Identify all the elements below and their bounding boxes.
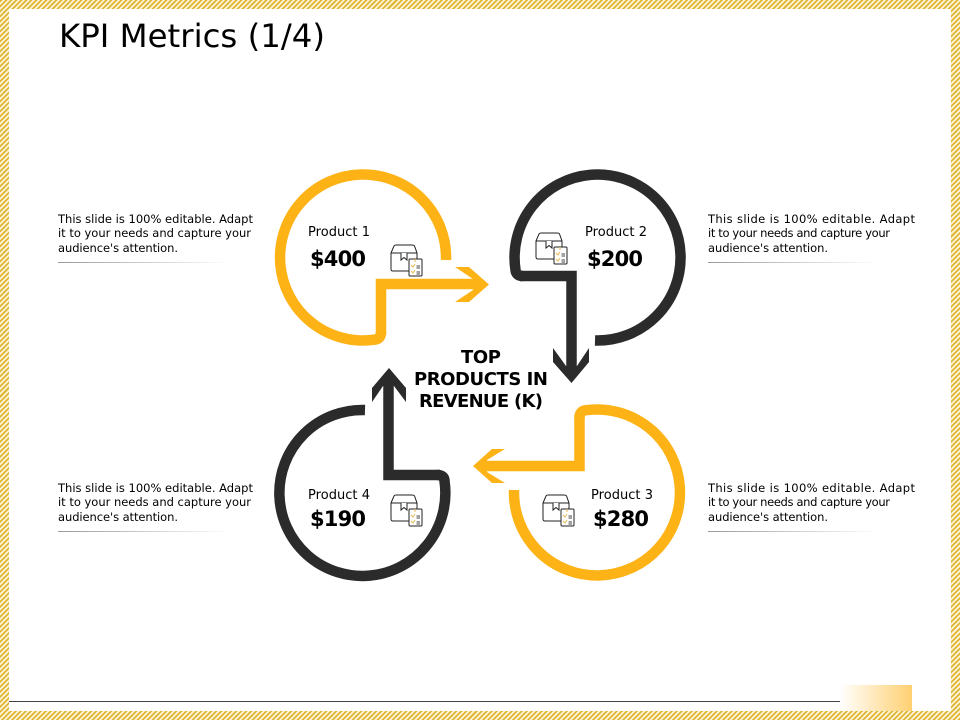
center heading: REVENUE (K) [419, 391, 543, 412]
text block: top right: This slide is 100% editable. Adapt [707, 212, 915, 226]
text block: top left: it to your needs and capture your [58, 226, 251, 240]
icon: box with checklist, product 2 [536, 233, 567, 264]
text block: top right: it to your needs and capture your [708, 226, 890, 240]
text block: bottom left: audience's attention. [58, 510, 178, 524]
center heading: TOP [461, 347, 501, 368]
title: KPI Metrics (1/4) [59, 17, 325, 55]
footer gradient tab [840, 685, 912, 711]
text block: bottom right: audience's attention. [708, 510, 828, 524]
text block: top left: audience's attention. [58, 241, 178, 255]
label: product 1: Product 1 [308, 225, 370, 240]
arrow ring: product 2 [515, 174, 681, 383]
text block: bottom left: it to your needs and capture your [58, 495, 251, 509]
icon: box with checklist, product 4 [391, 495, 422, 526]
center heading: PRODUCTS IN [414, 369, 548, 390]
text block: bottom right: it to your needs and capture your [708, 495, 890, 509]
text block: top right [707, 212, 915, 263]
text block: bottom left: This slide is 100% editable. Adapt [57, 481, 253, 495]
label: product 1 [308, 225, 370, 271]
label: product 2: $200 [587, 247, 643, 271]
label: product 2 [585, 225, 647, 271]
center heading [414, 347, 548, 412]
text block: bottom left [57, 481, 253, 532]
label: product 3: $280 [593, 507, 649, 531]
label: product 3: Product 3 [591, 488, 653, 503]
label: product 2: Product 2 [585, 225, 647, 240]
text block: bottom right [707, 481, 915, 532]
text block: top left [57, 212, 253, 263]
text block: top left: This slide is 100% editable. Adapt [57, 212, 253, 226]
label: product 4: Product 4 [308, 488, 370, 503]
label: product 4 [308, 488, 370, 531]
footer line [9, 701, 840, 702]
text block: bottom right: This slide is 100% editable. Adapt [707, 481, 915, 495]
label: product 3 [591, 488, 653, 531]
text block: top right: audience's attention. [708, 241, 828, 255]
label: product 4: $190 [310, 507, 366, 531]
label: product 1: $400 [310, 247, 366, 271]
icon: box with checklist, product 3 [543, 495, 574, 526]
arrow ring: product 3 [473, 409, 680, 575]
arrow ring: product 4 [279, 368, 445, 576]
icon: box with checklist, product 1 [391, 245, 422, 276]
arrow ring: product 1 [280, 174, 489, 340]
